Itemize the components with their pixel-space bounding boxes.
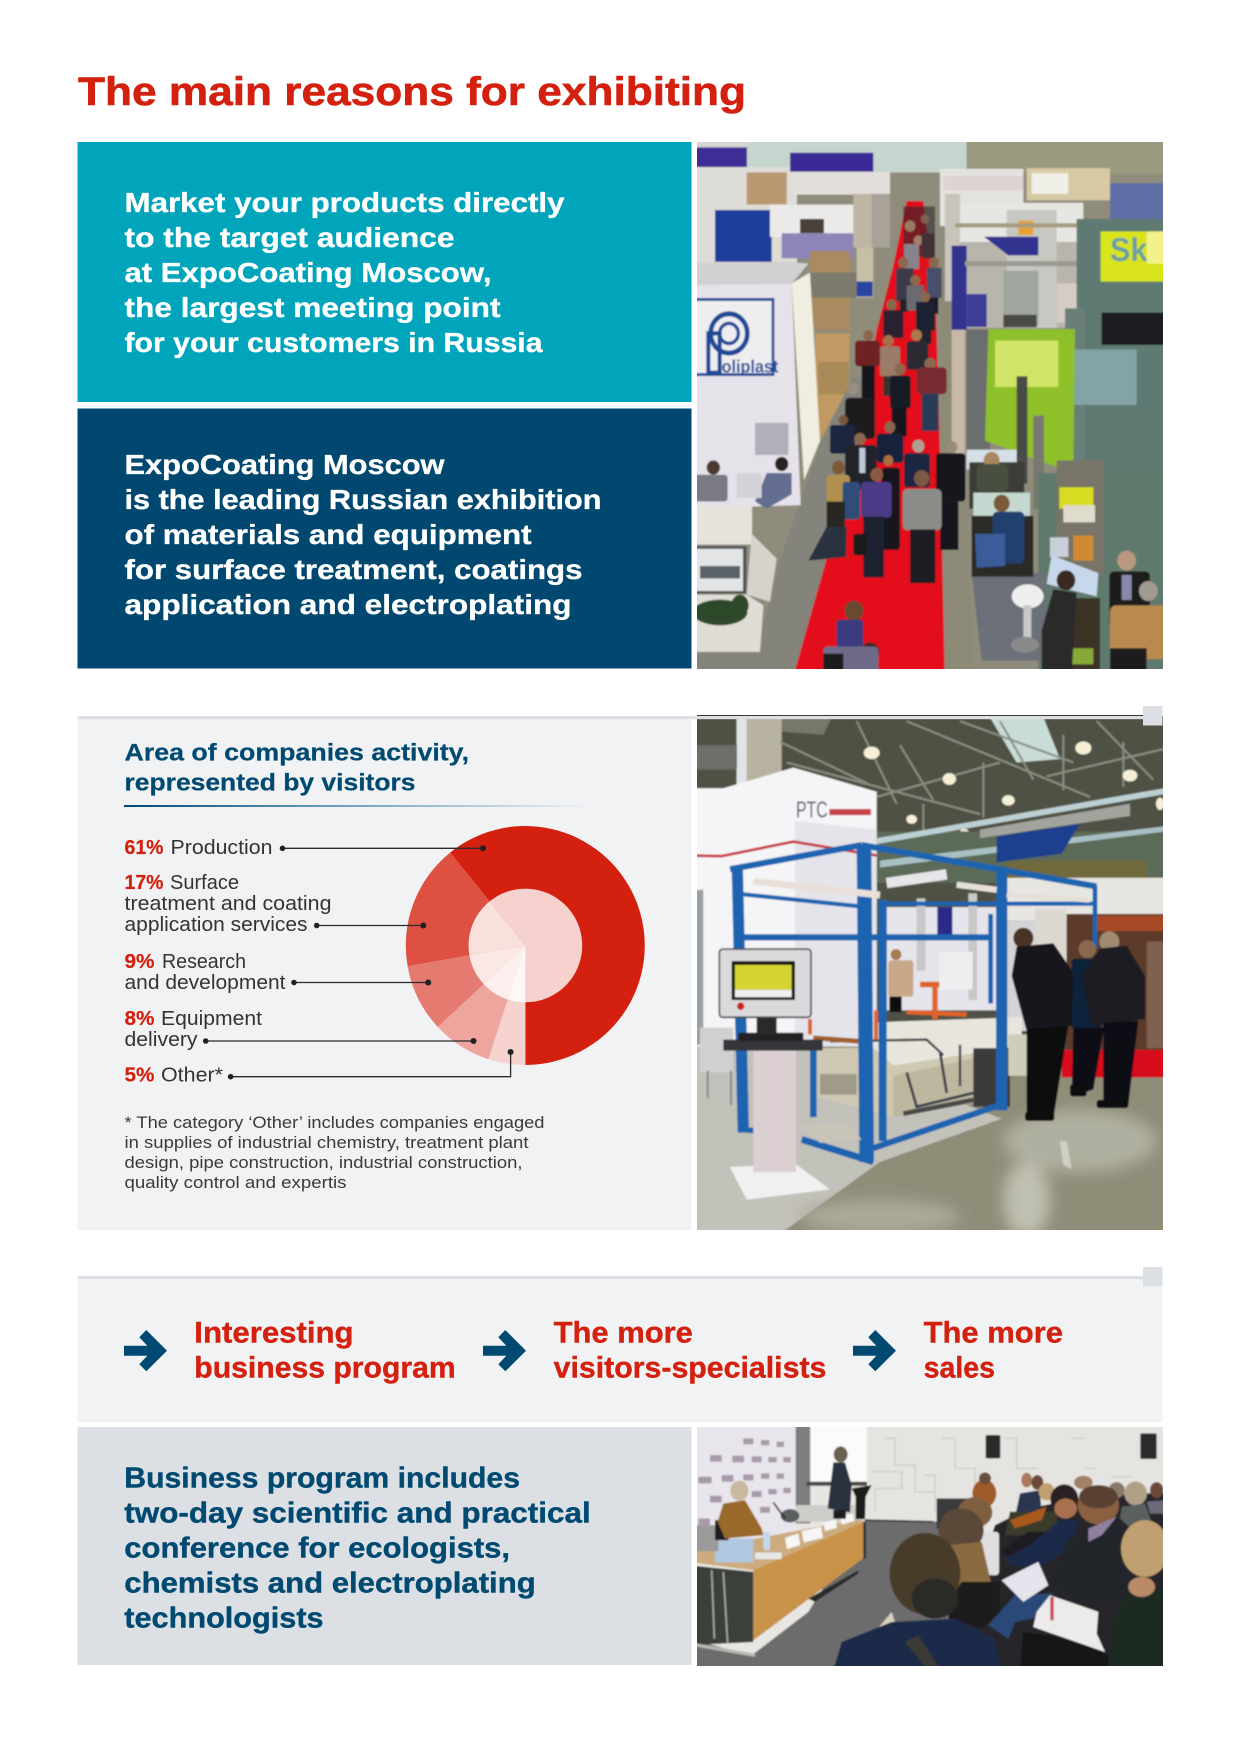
text: market your products: for your customers in Russia: [124, 327, 543, 358]
footnote: quality control and expertis: [124, 1173, 346, 1192]
text: market your products: to the target audience: [124, 222, 454, 253]
label: other: 5%: [124, 1064, 155, 1086]
slice: production 61%: [450, 826, 645, 1065]
label: research: [124, 951, 431, 994]
footnote: * The category ‘Other’ includes companies engaged: [124, 1113, 544, 1132]
text: market your products: Market your products directly: [124, 187, 565, 218]
text: market your products: [124, 187, 565, 358]
slice: surface treatment 17%: [406, 853, 525, 966]
label: other: Other*: [161, 1064, 223, 1086]
text: business program: chemists and electroplating: [124, 1568, 536, 1600]
arrow 2: [483, 1330, 526, 1371]
text: leading russian exhibition: application and electroplating: [124, 589, 572, 620]
slice: other 5%: [488, 946, 525, 1065]
photo: blue coating line on a stand: [697, 716, 1163, 1230]
polished floor highlights: [800, 1110, 1157, 1238]
step 3 text: [924, 1316, 1063, 1384]
title: The main reasons for exhibiting: [78, 70, 746, 114]
crowd: [693, 206, 1200, 702]
text: leading russian exhibition: is the leading Russian exhibition: [124, 484, 602, 515]
text: market your products: the largest meeting point: [124, 292, 500, 323]
text: business program: conference for ecologists,: [124, 1533, 510, 1565]
label: surface treatment: [124, 872, 426, 936]
blue frame: [730, 845, 1097, 1162]
arrow 1: [124, 1330, 167, 1371]
label: other: [124, 1049, 514, 1086]
text: leading russian exhibition: for surface treatment, coatings: [124, 554, 582, 585]
chart heading: Area of companies activity,: [124, 740, 469, 766]
label: production: [124, 837, 486, 859]
step 1 text: Interesting: [194, 1316, 354, 1350]
panel: process chain: [78, 1267, 1162, 1422]
photo: conference audience: [697, 1427, 1163, 1666]
text: business program: two-day scientific and practical: [124, 1498, 591, 1530]
label: surface treatment: application services: [124, 914, 308, 936]
label: research: Research: [162, 951, 246, 973]
footnote: in supplies of industrial chemistry, treatment plant: [124, 1133, 529, 1152]
step 3 text: The more: [924, 1316, 1063, 1350]
label: surface treatment: Surface: [170, 872, 239, 894]
step 1 text: [194, 1316, 456, 1384]
step 1 text: business program: [194, 1352, 456, 1384]
step 2 text: visitors-specialists: [554, 1352, 826, 1384]
panel: leading russian exhibition: [78, 408, 692, 668]
step 2 text: The more: [554, 1316, 693, 1350]
text: leading russian exhibition: ExpoCoating Moscow: [124, 449, 445, 480]
label: equipment: [124, 1008, 476, 1051]
text: market your products: at ExpoCoating Moscow,: [124, 257, 492, 288]
text: leading russian exhibition: of materials and equipment: [124, 519, 532, 550]
donut chart: [406, 826, 645, 1065]
panel: business program: [78, 1427, 692, 1665]
coating bath tanks: [810, 983, 1030, 1117]
text: leading russian exhibition: [124, 449, 602, 620]
label: surface treatment: 17%: [124, 872, 164, 894]
label: production: 61%: [124, 837, 164, 859]
top rule of chart panel: [78, 706, 1162, 726]
footnote: [124, 1113, 544, 1192]
audience: [827, 1472, 1195, 1692]
photo: exhibition aisle with red carpet: Sk: [1110, 231, 1148, 268]
photo: blue coating line on a stand: PTC: [796, 797, 828, 823]
text: business program: Business program includes: [124, 1463, 520, 1495]
arrow 3: [853, 1330, 896, 1371]
text: business program: [124, 1463, 591, 1635]
panel: area of companies activity: [78, 716, 692, 1230]
label: production: Production: [170, 837, 272, 859]
footnote: design, pipe construction, industrial construction,: [124, 1153, 522, 1172]
label: equipment: Equipment: [161, 1008, 262, 1030]
panel: market your products: [78, 142, 692, 402]
label: research: and development: [124, 972, 286, 994]
visitors: [1012, 928, 1145, 1121]
control panel and pedestal: [719, 949, 830, 1200]
photo: exhibition aisle with red carpet: oliplast: [722, 356, 779, 377]
chart heading: [124, 740, 469, 796]
slice: equipment 8%: [438, 946, 525, 1059]
chart heading: represented by visitors: [124, 770, 416, 796]
label: equipment: delivery: [124, 1029, 198, 1051]
step 3 text: sales: [924, 1352, 995, 1384]
photo: exhibition aisle with red carpet: [697, 142, 1163, 669]
label: equipment: 8%: [124, 1008, 155, 1030]
text: business program: technologists: [124, 1603, 324, 1635]
label: surface treatment: treatment and coating: [124, 893, 332, 915]
slice: research 9%: [408, 946, 525, 1027]
label: research: 9%: [124, 951, 155, 973]
step 2 text: [554, 1316, 826, 1384]
